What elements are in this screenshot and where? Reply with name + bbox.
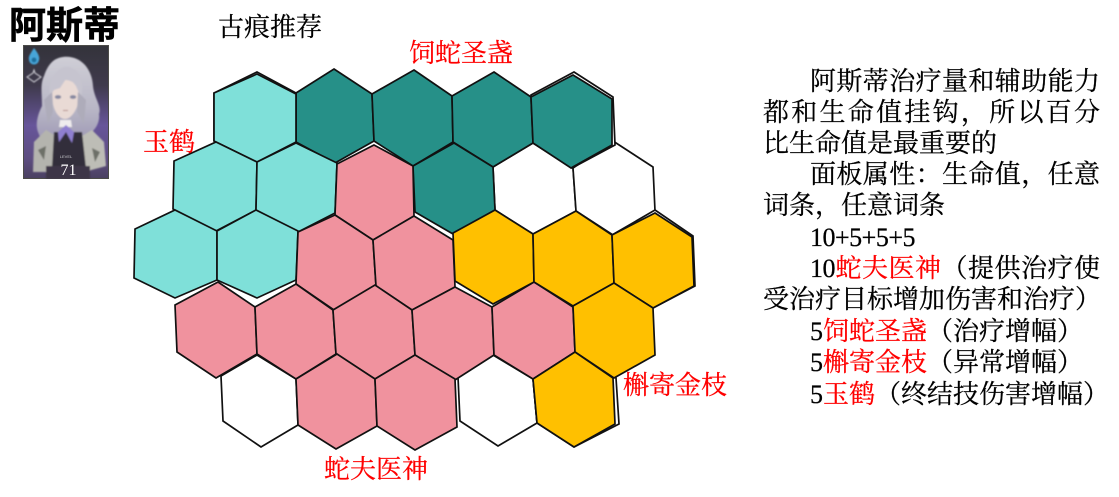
paragraph: panel attributes: 面板属性：生命值，任意 (810, 160, 1100, 189)
paragraph: panel attributes (763, 160, 1100, 220)
label: 饲蛇圣盏: 饲蛇圣盏 (409, 39, 513, 68)
long hair back (37, 57, 100, 142)
paragraph: healing summary: 都和生命值挂钩，所以百分 (763, 98, 1100, 127)
hex group: 饲蛇圣盏 dark teal (296, 69, 615, 234)
line: 槲寄金枝 effect: 5槲寄金枝（异常增幅） (810, 348, 1083, 377)
dark dress (52, 132, 86, 168)
line: 玉鹤 effect: 5玉鹤（终结技伤害增幅） (810, 380, 1109, 409)
hex group: 蛇夫医神 pink (175, 145, 575, 450)
text block: build explanation (763, 67, 1109, 409)
paragraph: healing summary (763, 67, 1100, 158)
paragraph: 蛇夫医神 effect (763, 254, 1101, 314)
hex group: 玉鹤 light teal (134, 72, 337, 298)
character portrait card: LEVEL (60, 154, 73, 159)
hex group: empty slots (221, 141, 655, 447)
eyes and mouth (55, 95, 61, 99)
paragraph: 蛇夫医神 effect: 10蛇夫医神（提供治疗使 (810, 254, 1100, 283)
heading: recommended relics: 古痕推荐 (218, 13, 322, 42)
paragraph: healing summary: 比生命值是最重要的 (763, 129, 997, 158)
class emblem (27, 70, 41, 82)
character portrait card (23, 45, 109, 179)
element drop icon (29, 48, 39, 64)
label: 蛇夫医神: 蛇夫医神 (324, 455, 428, 484)
collar and bow (59, 120, 72, 127)
line: 饲蛇圣盏 effect: 5饲蛇圣盏（治疗增幅） (810, 317, 1083, 346)
fringe (52, 80, 79, 92)
honeycomb chart and portrait (23, 45, 696, 451)
coat (33, 130, 58, 172)
paragraph: panel attributes: 词条，任意词条 (763, 191, 945, 220)
line: set combination: 10+5+5+5 (810, 223, 915, 252)
label: 玉鹤: 玉鹤 (143, 128, 195, 157)
paragraph: 蛇夫医神 effect: 受治疗目标增加伤害和治疗） (763, 285, 1101, 314)
character portrait card: 71 (60, 162, 76, 179)
title: character name: 阿斯蒂 (9, 5, 120, 46)
paragraph: healing summary: 阿斯蒂治疗量和辅助能力 (810, 67, 1100, 96)
hex group: 槲寄金枝 gold (453, 210, 695, 447)
face (52, 80, 79, 119)
label: 槲寄金枝: 槲寄金枝 (623, 371, 727, 400)
